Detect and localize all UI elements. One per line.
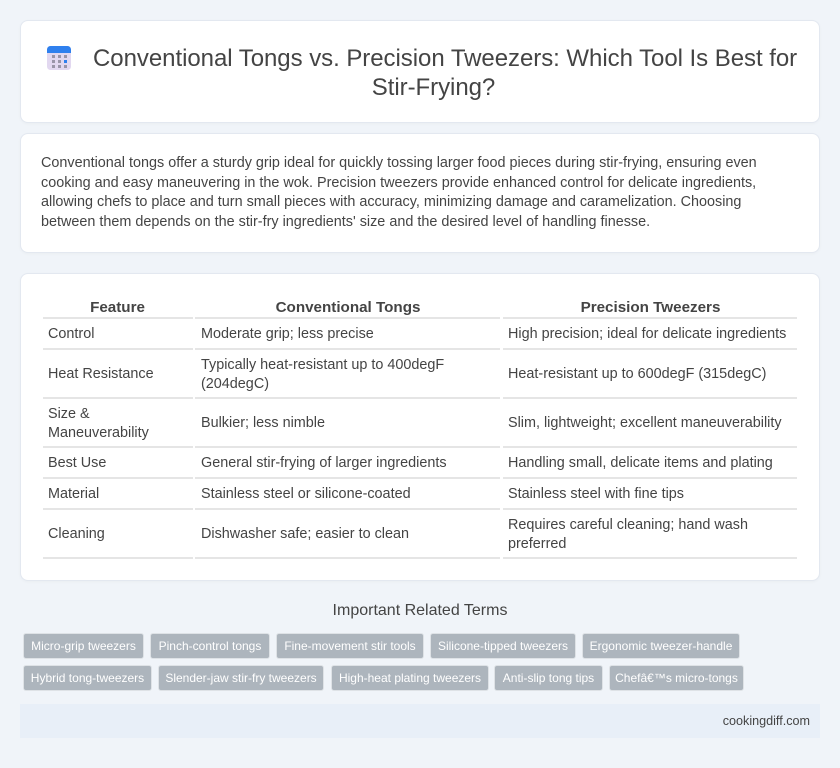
table row: heat resistance: Heat Resistance: [48, 366, 154, 382]
table header: Feature: [90, 299, 145, 316]
related terms chips: Fine-movement stir tools: [284, 639, 416, 653]
table row: cleaning: preferred: [508, 536, 566, 552]
table row: material: Stainless steel with fine tips: [508, 486, 684, 502]
table row: heat resistance: Typically heat-resistant up to 400degF: [201, 357, 444, 373]
related terms chips: Anti-slip tong tips: [503, 671, 594, 685]
related terms chips: Chefâ€™s micro-tongs: [615, 671, 738, 685]
table row: cleaning: Cleaning: [48, 526, 105, 542]
text: Stir-Frying?: [372, 74, 495, 101]
panel: introduction: [20, 133, 820, 253]
table row: best use: Best Use: [48, 455, 106, 471]
table row: size and maneuverability: Size &: [48, 406, 90, 422]
table row: heat resistance: (204degC): [201, 376, 269, 392]
table row: control: [48, 326, 786, 342]
table row: best use: [48, 455, 773, 471]
panel: comparison table: [20, 273, 820, 581]
table row: best use: General stir-frying of larger ingredients: [201, 455, 447, 471]
heading: related terms: Important Related Terms: [333, 602, 507, 619]
icon: calendar: [47, 46, 71, 70]
table header: Conventional Tongs: [276, 299, 420, 316]
table row: control: Moderate grip; less precise: [201, 326, 374, 342]
footer bar: [20, 704, 820, 738]
table row: best use: Handling small, delicate items and plating: [508, 455, 773, 471]
related terms chips: Slender-jaw stir-fry tweezers: [165, 671, 317, 685]
text block: introduction: cooking and easy maneuvering in the wok. Precision tweezers provide enhanced control for delicate ingredients,: [41, 175, 756, 191]
text block: introduction: allowing chefs to place and turn small pieces with accuracy, minimizing damage and caramelization. Choosing: [41, 194, 741, 210]
table row: size and maneuverability: Slim, lightweight; excellent maneuverability: [508, 415, 782, 431]
related terms chips: Silicone-tipped tweezers: [438, 639, 568, 653]
table row: material: Stainless steel or silicone-coated: [201, 486, 411, 502]
related terms chips: Pinch-control tongs: [159, 639, 261, 653]
related terms chips: [23, 633, 744, 691]
text block: introduction: between them depends on the stir-fry ingredients' size and the desired level of handling finesse.: [41, 214, 650, 230]
text: Conventional Tongs vs. Precision Tweezers: Which Tool Is Best for: [93, 45, 797, 72]
related terms chips: Micro-grip tweezers: [31, 639, 136, 653]
text block: introduction: Conventional tongs offer a sturdy grip ideal for quickly tossing larger food pieces during stir-frying, ensuring even: [41, 155, 757, 171]
related terms chips: Hybrid tong-tweezers: [31, 671, 144, 685]
table row: cleaning: Requires careful cleaning; hand wash: [508, 517, 748, 533]
table row: control: High precision; ideal for delicate ingredients: [508, 326, 786, 342]
table row: cleaning: [48, 517, 748, 552]
title: [93, 45, 797, 101]
panel: title card: [20, 20, 820, 123]
table row: size and maneuverability: [48, 406, 782, 441]
table row: heat resistance: [48, 357, 766, 392]
related terms chips: Ergonomic tweezer-handle: [590, 639, 732, 653]
table row: heat resistance: Heat-resistant up to 600degF (315degC): [508, 366, 766, 382]
table row: size and maneuverability: Maneuverability: [48, 425, 149, 441]
table row: control: Control: [48, 326, 94, 342]
table row: size and maneuverability: Bulkier; less nimble: [201, 415, 325, 431]
table row: cleaning: Dishwasher safe; easier to clean: [201, 526, 409, 542]
table row: material: [48, 486, 684, 502]
footer source text: cookingdiff.com: [723, 714, 810, 728]
text block: introduction: [41, 155, 757, 230]
related terms chips: High-heat plating tweezers: [339, 671, 481, 685]
table header: [90, 299, 720, 316]
table header: Precision Tweezers: [581, 299, 720, 316]
table row: material: Material: [48, 486, 99, 502]
